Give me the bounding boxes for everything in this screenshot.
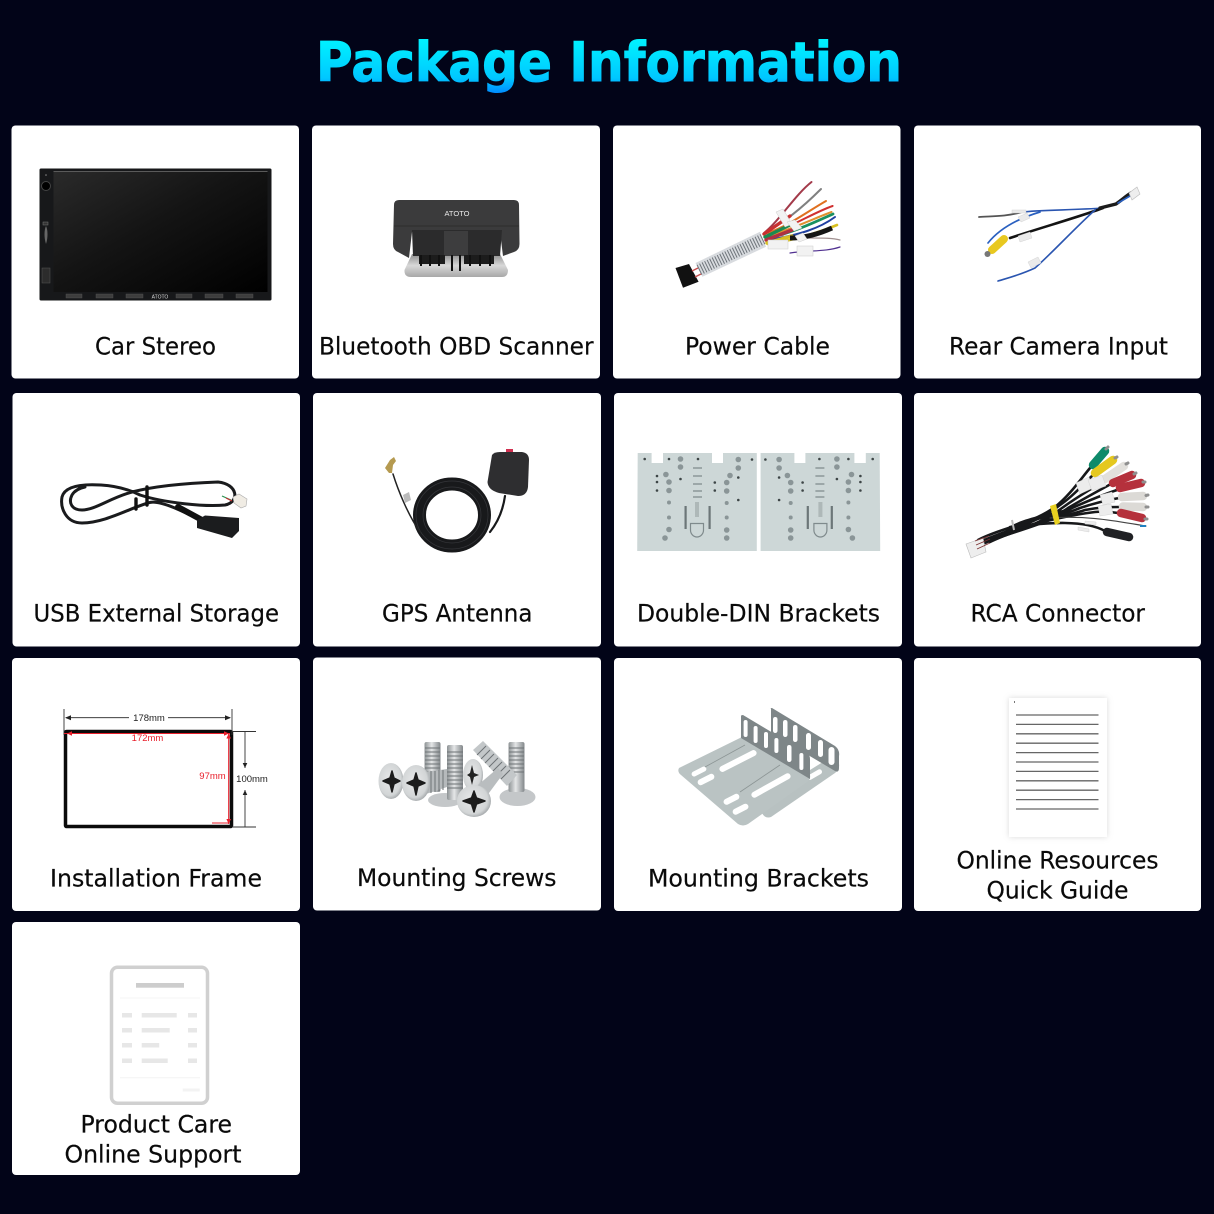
panel: double-din brackets xyxy=(614,393,902,646)
title: Package Information xyxy=(316,31,902,94)
icon: frame dimensions diagram: 178mm xyxy=(133,713,165,724)
label: Car Stereo xyxy=(95,332,216,360)
icon: car stereo unit xyxy=(40,168,272,300)
icon: power cable harness xyxy=(676,182,840,288)
panel: rear camera input xyxy=(914,126,1201,378)
panel: bluetooth obd scanner xyxy=(312,126,600,378)
label: Double-DIN Brackets xyxy=(637,600,880,628)
label: Mounting Screws xyxy=(357,864,556,892)
panel: product care online support xyxy=(12,922,300,1175)
icon: frame dimensions diagram xyxy=(64,709,268,827)
label: GPS Antenna xyxy=(382,600,532,628)
label: Mounting Brackets xyxy=(648,865,869,893)
icon: obd scanner xyxy=(393,200,520,277)
icon: guide page xyxy=(1009,698,1107,837)
icon: frame dimensions diagram: 97mm xyxy=(199,771,226,782)
label: USB External Storage xyxy=(34,600,279,628)
icon: obd scanner: ATOTO xyxy=(444,209,470,218)
label: Quick Guide xyxy=(986,876,1128,904)
panel: car stereo xyxy=(12,126,299,378)
icon: screws xyxy=(378,741,536,817)
icon: frame dimensions diagram: 172mm xyxy=(132,733,163,744)
panel: installation frame xyxy=(12,658,300,911)
label: Bluetooth OBD Scanner xyxy=(319,332,594,360)
icon: rear camera cable xyxy=(979,187,1140,281)
icon: car stereo unit: ATOTO xyxy=(152,294,168,300)
icon: gps antenna xyxy=(385,449,529,549)
label: Rear Camera Input xyxy=(949,332,1168,360)
panel: power cable xyxy=(613,126,900,378)
label: Installation Frame xyxy=(50,865,262,893)
label: Online Resources xyxy=(956,846,1158,874)
panel: gps antenna xyxy=(313,393,601,646)
label: Online Support xyxy=(64,1141,242,1169)
label xyxy=(956,846,1158,904)
icon: frame dimensions diagram: 100mm xyxy=(236,774,268,785)
panel: online resources quick guide xyxy=(914,658,1201,911)
icon: mounting brackets xyxy=(678,708,839,826)
label: Product Care xyxy=(80,1111,232,1139)
panel: usb external storage xyxy=(12,393,300,646)
panel: mounting brackets xyxy=(614,658,902,911)
icon: rca cable xyxy=(966,447,1148,558)
icon: product care card xyxy=(112,967,208,1103)
icon: usb cable xyxy=(62,482,247,538)
panel: mounting screws xyxy=(313,658,601,910)
label xyxy=(64,1111,242,1169)
panel: rca connector xyxy=(914,393,1201,646)
label: Power Cable xyxy=(685,332,830,360)
label: RCA Connector xyxy=(970,600,1145,628)
icon: double-din plates xyxy=(637,453,880,551)
